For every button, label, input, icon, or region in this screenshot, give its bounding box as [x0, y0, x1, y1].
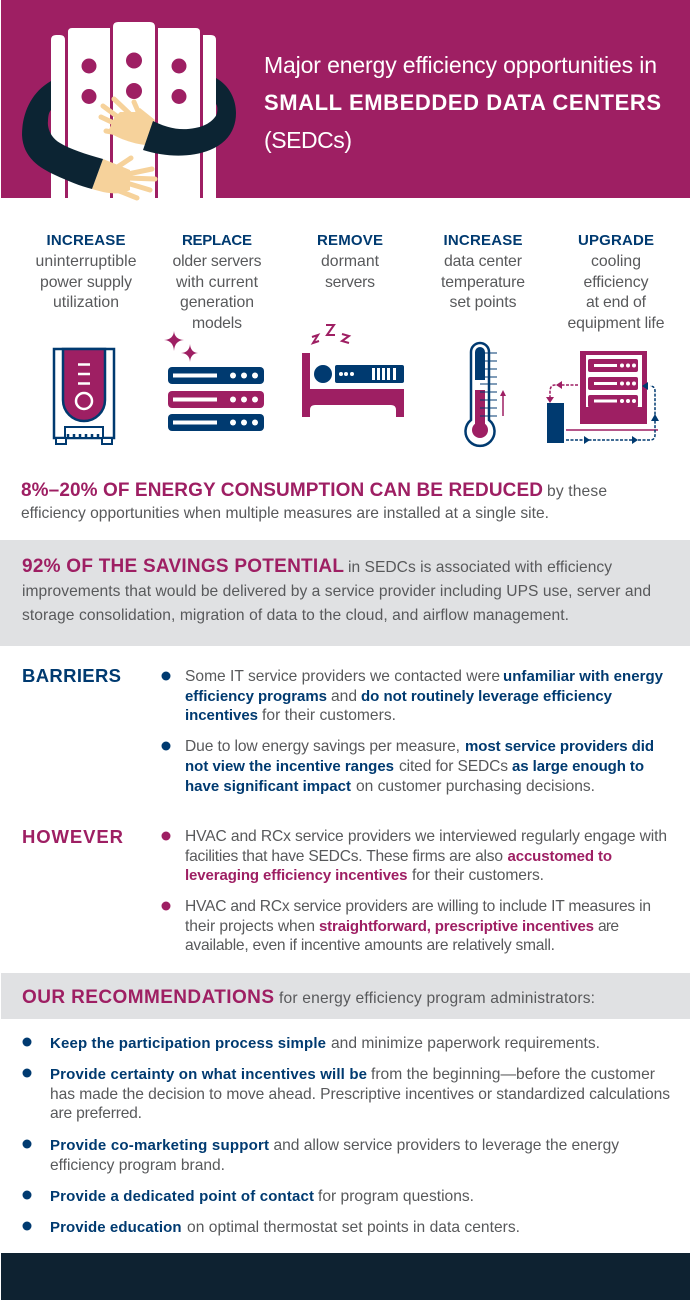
- column: temperature: data center: [444, 253, 522, 270]
- barrier item 1: unfamiliar with energy: [503, 668, 664, 685]
- column: temperature: set points: [450, 294, 517, 311]
- recommendation 4: [22, 1188, 474, 1205]
- header banner: [1, 0, 690, 198]
- recommendation 5: Provide education: [50, 1219, 182, 1236]
- however item 1: leveraging efficiency incentives: [185, 867, 408, 884]
- barrier item 1: for their customers.: [262, 707, 396, 724]
- barrier item 2: not view the incentive ranges: [185, 758, 394, 775]
- however item 2: [162, 898, 651, 954]
- panel: 92% savings potential: [0, 540, 690, 646]
- icon: sleeping server in bed: [302, 325, 404, 417]
- title: Major energy efficiency opportunities in: [264, 52, 657, 78]
- column: dormant: dormant: [321, 253, 380, 270]
- however item 1: HVAC and RCx service providers we interviewed regularly engage with: [185, 828, 667, 845]
- column: UPS: utilization: [53, 294, 119, 311]
- column: servers: models: [192, 315, 242, 332]
- recommendation 5: [22, 1219, 520, 1236]
- recommendation 2: are preferred.: [50, 1105, 142, 1122]
- column: UPS: uninterruptible: [36, 253, 137, 270]
- column: servers: [172, 232, 262, 332]
- barrier item 2: as large enough to: [512, 758, 644, 775]
- recommendation 3: and allow service providers to leverage the energy: [274, 1137, 619, 1154]
- recommendation 1: [22, 1035, 600, 1052]
- panel: 92% savings potential: storage consolidation, migration of data to the cloud, and airflow management.: [22, 607, 569, 624]
- panel: 92% savings potential: 92% OF THE SAVINGS POTENTIAL: [22, 556, 344, 577]
- recommendation 1: and minimize paperwork requirements.: [331, 1035, 600, 1052]
- panel: five opportunities: [36, 232, 665, 446]
- column: UPS: power supply: [40, 274, 132, 291]
- column: temperature: INCREASE: [444, 232, 522, 249]
- panel: 92% savings potential: in SEDCs is associated with efficiency: [348, 559, 612, 576]
- column: dormant: servers: [325, 274, 375, 291]
- recommendation 3: Provide co-marketing support: [50, 1137, 269, 1154]
- recommendation 3: [22, 1137, 619, 1174]
- callout: 8%-20% reduction: by these: [547, 483, 607, 500]
- however item 1: [162, 828, 667, 884]
- list: recommendations: [22, 1035, 670, 1236]
- callout: 8%-20% reduction: [21, 480, 607, 522]
- however item 1: for their customers.: [412, 867, 544, 884]
- column: cooling: cooling: [591, 253, 641, 270]
- column: cooling: efficiency: [584, 274, 649, 291]
- barrier item 1: [162, 668, 664, 724]
- column: UPS: [36, 232, 137, 311]
- however item 2: are: [598, 918, 619, 935]
- column: servers: generation: [180, 294, 254, 311]
- however item 1: accustomed to: [508, 848, 612, 865]
- icon: cooling system: [546, 351, 659, 444]
- icon: new servers with sparkles: [164, 331, 264, 431]
- panel: recommendations heading: OUR RECOMMENDATIONS: [22, 987, 274, 1008]
- barrier item 2: Due to low energy savings per measure,: [185, 738, 460, 755]
- recommendation 5: on optimal thermostat set points in data centers.: [187, 1219, 520, 1236]
- panel: however: [22, 826, 667, 954]
- column: servers: older servers: [172, 253, 262, 270]
- panel: recommendations heading: [1, 973, 690, 1019]
- recommendation 4: for program questions.: [318, 1188, 474, 1205]
- barrier item 1: and: [331, 688, 357, 705]
- barrier item 2: [162, 738, 654, 795]
- title: SMALL EMBEDDED DATA CENTERS: [264, 90, 661, 115]
- recommendation 2: has made the decision to move ahead. Prescriptive incentives or standardized calculations: [50, 1086, 670, 1103]
- column: temperature: temperature: [441, 274, 525, 291]
- recommendation 2: Provide certainty on what incentives will be: [50, 1066, 367, 1083]
- barrier item 1: efficiency programs: [185, 688, 327, 705]
- however item 1: facilities that have SEDCs. These firms are also: [185, 848, 503, 865]
- barrier item 2: on customer purchasing decisions.: [356, 778, 595, 795]
- however item 2: straightforward, prescriptive incentives: [319, 918, 594, 935]
- barrier item 1: do not routinely leverage efficiency: [361, 688, 613, 705]
- title: (SEDCs): [264, 127, 352, 153]
- recommendation 3: efficiency program brand.: [50, 1157, 225, 1174]
- title: [264, 52, 661, 153]
- icon: arms hugging servers: [22, 22, 236, 198]
- however item 2: available, even if incentive amounts are relatively small.: [185, 937, 555, 954]
- barrier item 2: most service providers did: [465, 738, 654, 755]
- barrier item 1: Some IT service providers we contacted were: [185, 668, 500, 685]
- panel: recommendations heading: for energy efficiency program administrators:: [279, 990, 595, 1007]
- icon: UPS unit: [54, 349, 114, 444]
- barrier item 1: incentives: [185, 707, 258, 724]
- column: servers: REPLACE: [182, 232, 252, 249]
- column: temperature: [441, 232, 525, 311]
- however item 2: their projects when: [185, 918, 315, 935]
- icon: thermometer: [465, 343, 506, 446]
- recommendation 1: Keep the participation process simple: [50, 1035, 326, 1052]
- column: servers: with current: [175, 274, 259, 291]
- panel: 92% savings potential: improvements that would be delivered by a service provider including UPS use, server and: [22, 583, 651, 600]
- heading: barriers: BARRIERS: [22, 665, 121, 686]
- column: cooling: at end of: [586, 294, 647, 311]
- recommendation 4: Provide a dedicated point of contact: [50, 1188, 314, 1205]
- column: cooling: UPGRADE: [578, 232, 654, 249]
- column: UPS: INCREASE: [46, 232, 126, 249]
- recommendation 2: from the beginning—before the customer: [371, 1066, 655, 1083]
- column: cooling: [568, 232, 665, 332]
- footer bar: [1, 1253, 690, 1300]
- barrier item 2: have significant impact: [185, 778, 351, 795]
- however item 2: HVAC and RCx service providers are willing to include IT measures in: [185, 898, 651, 915]
- callout: 8%-20% reduction: 8%–20% OF ENERGY CONSUMPTION CAN BE REDUCED: [21, 480, 543, 501]
- heading: however: HOWEVER: [22, 826, 123, 847]
- column: dormant: [317, 232, 383, 291]
- panel: barriers: [22, 665, 664, 795]
- column: dormant: REMOVE: [317, 232, 383, 249]
- callout: 8%-20% reduction: efficiency opportunities when multiple measures are installed at a single site.: [21, 505, 549, 522]
- barrier item 2: cited for SEDCs: [399, 758, 508, 775]
- column: cooling: equipment life: [568, 315, 665, 332]
- recommendation 2: [22, 1066, 670, 1122]
